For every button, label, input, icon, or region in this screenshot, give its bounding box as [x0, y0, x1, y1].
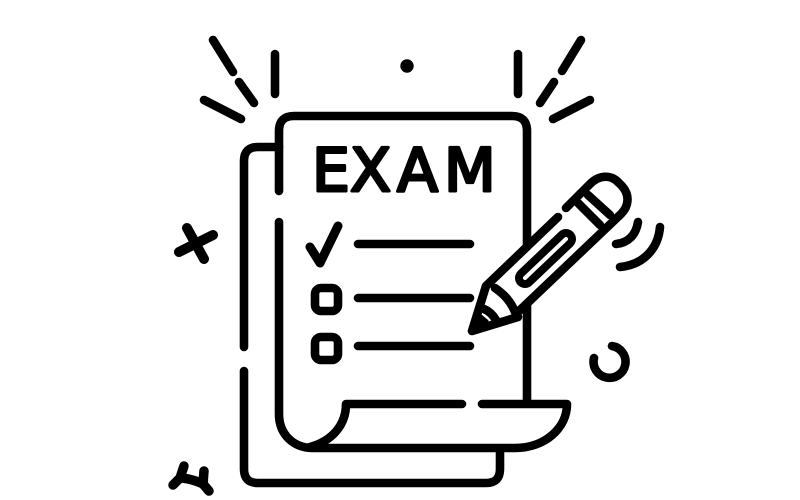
icon: motion arcs [616, 222, 660, 267]
icon: pencil [472, 177, 628, 331]
icon: check mark [310, 226, 338, 263]
icon: empty checkbox two [315, 337, 338, 360]
icon: center dot [400, 59, 414, 73]
icon: squiggle doodle [173, 466, 209, 491]
heading: EXAM: EXAM [312, 136, 496, 206]
icon: cross doodle [179, 228, 213, 259]
icon: left burst rays [204, 40, 275, 119]
back page [244, 147, 500, 483]
icon: empty checkbox one [315, 288, 338, 311]
line: second item [358, 294, 470, 302]
icon: letter C doodle [594, 346, 626, 378]
line: first item [358, 240, 470, 248]
line: third item [358, 342, 470, 350]
icon: right burst rays [518, 40, 590, 119]
front exam sheet [279, 116, 567, 448]
